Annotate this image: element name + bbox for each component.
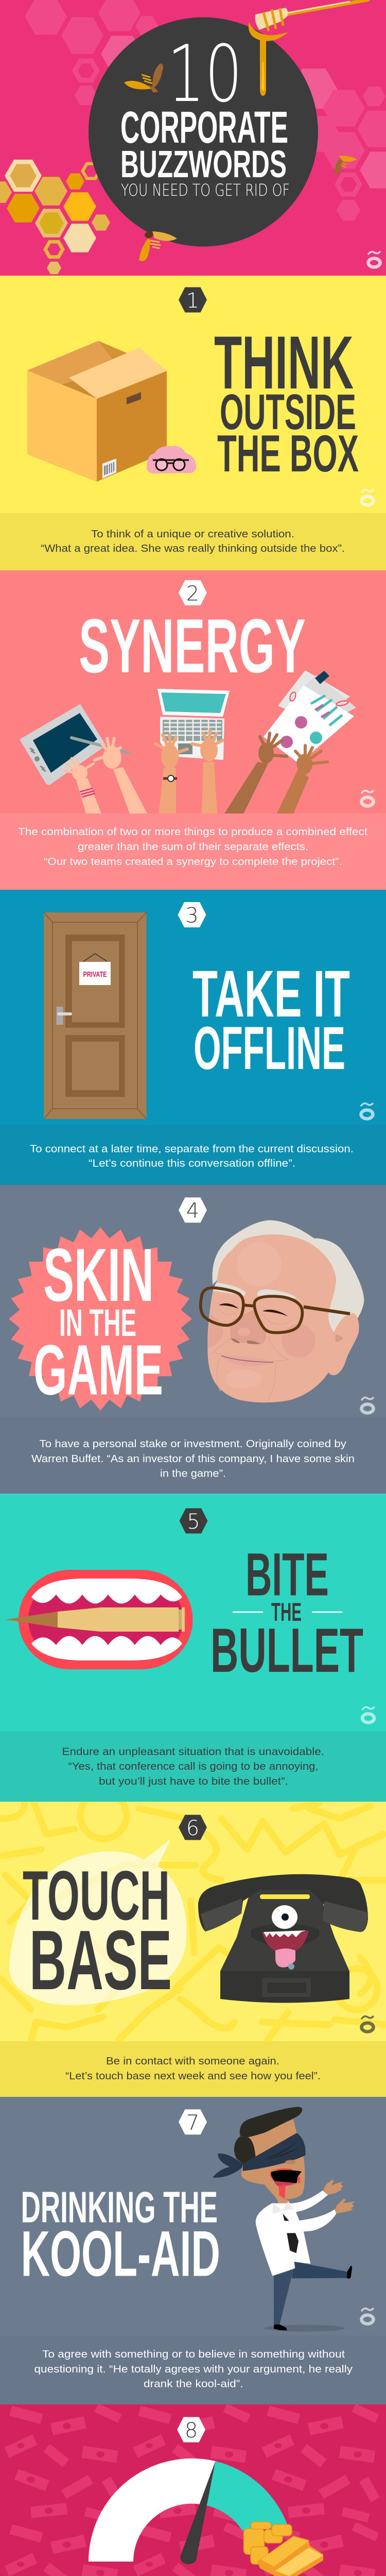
icon: cardboard box	[27, 341, 167, 482]
number badge 7: 7	[186, 2111, 199, 2135]
panel: hero title	[0, 0, 386, 276]
logo mark	[361, 2309, 374, 2324]
definition text: The combination of two or more things to produce a combined effect	[18, 826, 367, 838]
icon: laptop	[157, 689, 230, 760]
definition text: “Our two teams created a synergy to complete the project”.	[44, 856, 342, 868]
speech bubble	[9, 1839, 186, 2005]
number badge 2: 2	[186, 582, 199, 606]
heading	[192, 957, 350, 1082]
heading	[214, 320, 359, 483]
heading	[23, 1856, 172, 2007]
illustration: blindfolded man	[213, 2107, 355, 2332]
hand: dark	[224, 733, 287, 814]
heading	[21, 2183, 220, 2290]
number badge 6: 6	[186, 1817, 199, 1840]
title text	[120, 28, 290, 200]
logo mark	[361, 791, 374, 806]
illustration: monster telephone	[198, 1874, 368, 2003]
number badge 4: 4	[186, 1199, 199, 1223]
number badge 1: 1	[186, 289, 199, 313]
starburst badge	[9, 1227, 192, 1411]
heading: BITE	[245, 1540, 329, 1608]
definition text	[18, 826, 367, 868]
title text: YOU NEED TO GET RID OF	[121, 180, 290, 200]
heading: DRINKING THE	[21, 2183, 218, 2232]
gauge chart	[89, 2459, 288, 2564]
title text: BUZZWORDS	[120, 143, 287, 185]
background squiggle pattern	[0, 1792, 386, 2040]
honey dipper	[249, 0, 370, 96]
icon: tablet and pen	[20, 704, 129, 785]
hand: center right	[192, 730, 223, 814]
heading: KOOL-AID	[21, 2218, 220, 2290]
definition text: Warren Buffet. “As an investor of this company, I have some skin	[31, 1453, 355, 1465]
definition text: “Let’s continue this conversation offline”.	[89, 1157, 295, 1170]
definition text: Endure an unpleasant situation that is unavoidable.	[62, 1746, 324, 1758]
number badge 8	[177, 2417, 205, 2443]
number badge 5	[179, 1509, 208, 1534]
heading: TOUCH	[23, 1856, 170, 1935]
definition text: greater than the sum of their separate effects.	[78, 841, 308, 853]
icon: door with private sign: PRIVATE	[83, 970, 107, 979]
definition text: To think of a unique or creative solution.	[91, 528, 294, 540]
title text: 10	[167, 28, 242, 120]
dark title circle	[89, 18, 318, 246]
definition text	[41, 528, 345, 554]
icon: papers with charts	[264, 670, 356, 769]
number badge 3: 3	[185, 904, 199, 927]
panel: 3 take it offline	[0, 890, 386, 1185]
hand: tan	[277, 745, 327, 814]
number badge 7	[179, 2109, 207, 2135]
definition text: To have a personal stake or investment. Originally coined by	[39, 1438, 347, 1450]
number badge 6	[179, 1815, 207, 1840]
definition text: “Yes, that conference call is going to be annoying,	[68, 1760, 318, 1772]
number badge 8: 8	[185, 2419, 198, 2443]
definition text	[34, 2348, 353, 2390]
definition text: but you’ll just have to bite the bullet”.	[99, 1775, 288, 1787]
bee: top left	[124, 63, 163, 93]
icon: door with private sign	[44, 912, 147, 1119]
icon: coins and gold bars	[244, 2522, 323, 2576]
illustration: mouth biting bullet	[5, 1570, 192, 1669]
panel: 4 skin in the game	[0, 1185, 386, 1494]
panel: 6 touch base	[0, 1802, 386, 2097]
hands reaching	[63, 730, 327, 814]
heading	[33, 1233, 163, 1410]
gold honeycomb cluster	[0, 160, 110, 274]
background money pattern	[0, 2404, 386, 2576]
definition text: drank the kool-aid”.	[144, 2378, 243, 2390]
logo mark	[369, 252, 380, 267]
hand: light left large	[95, 738, 147, 814]
panel: 2 synergy	[0, 570, 386, 890]
panel: 1 think outside the box	[0, 276, 386, 570]
background pink honeycomb	[25, 0, 386, 221]
bee: bottom	[139, 231, 177, 261]
number badge 2	[179, 580, 207, 606]
heading: THE	[271, 1598, 302, 1626]
definition text: in the game”.	[160, 1467, 226, 1480]
logo mark	[361, 490, 374, 505]
logo mark	[361, 1104, 373, 1119]
definition text	[65, 2055, 321, 2082]
panel: 5 bite the bullet	[0, 1494, 386, 1802]
panel: 7 drinking the kool-aid	[0, 2097, 386, 2404]
illustration: Warren Buffett face	[201, 1220, 364, 1402]
heading: GAME	[33, 1330, 163, 1410]
number badge 3	[178, 902, 206, 927]
icon: brain with glasses	[147, 446, 196, 473]
definition text: “What a great idea. She was really thinking outside the box”.	[41, 543, 345, 554]
definition text: “Let’s touch base next week and see how you feel”.	[65, 2070, 321, 2082]
heading: SKIN	[43, 1233, 154, 1317]
logo mark	[362, 1707, 374, 1723]
heading: BASE	[29, 1913, 172, 2007]
logo mark	[361, 1398, 374, 1413]
heading	[210, 1540, 363, 1685]
hand: light left small	[63, 758, 101, 814]
definition text: To agree with something or to believe in something without	[42, 2348, 345, 2360]
panel: 8 move the needle	[0, 2404, 386, 2576]
definition text	[30, 1143, 354, 1170]
logo mark	[361, 2016, 374, 2032]
number badge 5: 5	[187, 1510, 200, 1534]
definition text: questioning it. “He totally agrees with your argument, he really	[34, 2363, 353, 2375]
number badge 1	[179, 287, 207, 313]
hand: center left	[155, 735, 187, 814]
definition text	[62, 1746, 324, 1787]
bee: right	[335, 156, 357, 174]
definition text: To connect at a later time, separate from the current discussion.	[30, 1143, 354, 1155]
definition text: Be in contact with someone again.	[106, 2055, 279, 2067]
definition text	[31, 1438, 355, 1480]
number badge 4	[179, 1197, 207, 1223]
heading: IN THE	[59, 1301, 136, 1344]
